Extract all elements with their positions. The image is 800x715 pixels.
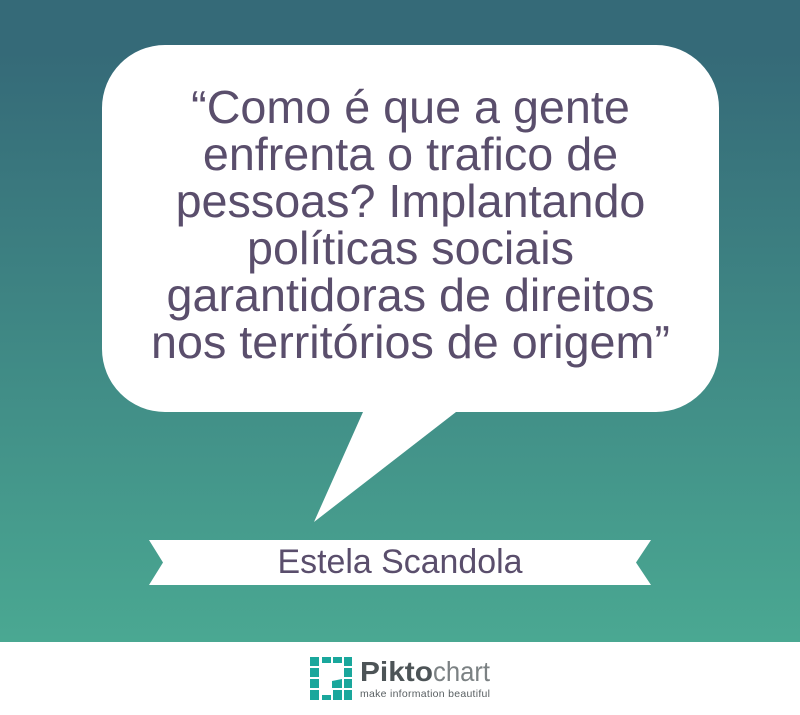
logo wordmark: make information beautiful (360, 688, 490, 700)
quote text: pessoas? Implantando (176, 175, 645, 227)
name label: Estela Scandola (278, 543, 522, 581)
quote text (151, 81, 670, 368)
quote text: “Como é que a gente (191, 81, 630, 133)
quote text: políticas sociais (247, 222, 574, 274)
quote text: garantidoras de direitos (167, 269, 654, 321)
logo wordmark: chart (433, 656, 490, 687)
quote text: enfrenta o trafico de (203, 128, 618, 180)
quote text: nos territórios de origem” (151, 316, 670, 368)
logo wordmark: Pikto (360, 656, 433, 687)
